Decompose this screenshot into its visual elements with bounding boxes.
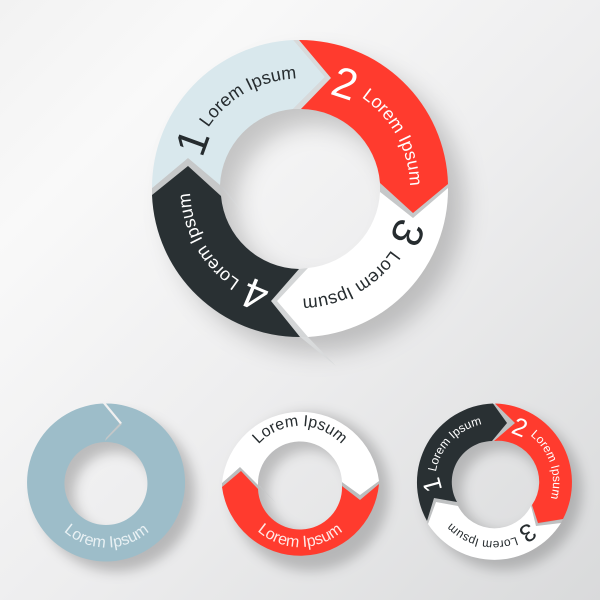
red segment — [494, 404, 572, 523]
red segment label: Lorem Ipsum — [531, 430, 560, 499]
segment 1 — [152, 40, 325, 188]
main ring diagram — [152, 40, 474, 366]
fold between segments 3 and 4 — [271, 268, 308, 337]
fold between segments 2 and 3 — [380, 183, 448, 218]
segment 3 number: 3 — [380, 212, 434, 253]
white segment label: Lorem Ipsum — [448, 523, 518, 548]
two-part ring streak — [258, 485, 276, 503]
small blue ring — [27, 404, 200, 577]
main ring shadow — [168, 56, 464, 352]
blue ring body — [27, 404, 185, 561]
two-part ring shadow — [231, 413, 389, 571]
three-part ring shadow — [424, 412, 582, 570]
segment 1 label: Lorem Ipsum — [199, 69, 296, 126]
blue ring notch shadow — [105, 423, 122, 441]
segment 3 label: Lorem Ipsum — [304, 251, 400, 308]
bottom red segment — [222, 471, 379, 556]
fold between segments 1 and 2 — [293, 40, 331, 109]
white segment — [428, 502, 561, 560]
red segment number: 2 — [508, 412, 531, 443]
top white segment — [222, 412, 379, 495]
dark segment number: 1 — [417, 474, 448, 495]
segment 2 number: 2 — [326, 57, 363, 111]
blue ring label: Lorem Ipsum — [64, 524, 148, 550]
blue ring white cut — [103, 404, 122, 424]
small three-part ring — [416, 404, 587, 575]
three-part ring folds — [427, 404, 563, 526]
bottom segment label: Lorem Ipsum — [258, 523, 342, 550]
segment 4 number: 4 — [235, 267, 276, 321]
white segment number: 3 — [514, 517, 541, 548]
segment 4 — [152, 166, 300, 337]
fold between segments 1 and 4 — [152, 158, 221, 196]
top segment label: Lorem Ipsum — [252, 415, 346, 444]
shadow streak lower — [299, 336, 336, 366]
two-part ring folds — [222, 467, 379, 500]
shadow streak upper — [220, 186, 248, 219]
blue ring shadow — [37, 414, 195, 571]
segment 2 label: Lorem Ipsum — [362, 88, 420, 185]
dark segment — [416, 404, 507, 521]
small two-part ring — [222, 408, 394, 576]
segment 2 — [299, 40, 448, 213]
segment 3 — [277, 188, 448, 337]
segment 1 number: 1 — [166, 123, 220, 162]
segment 4 label: Lorem Ipsum — [180, 194, 239, 290]
dark segment label: Lorem Ipsum — [428, 418, 482, 471]
